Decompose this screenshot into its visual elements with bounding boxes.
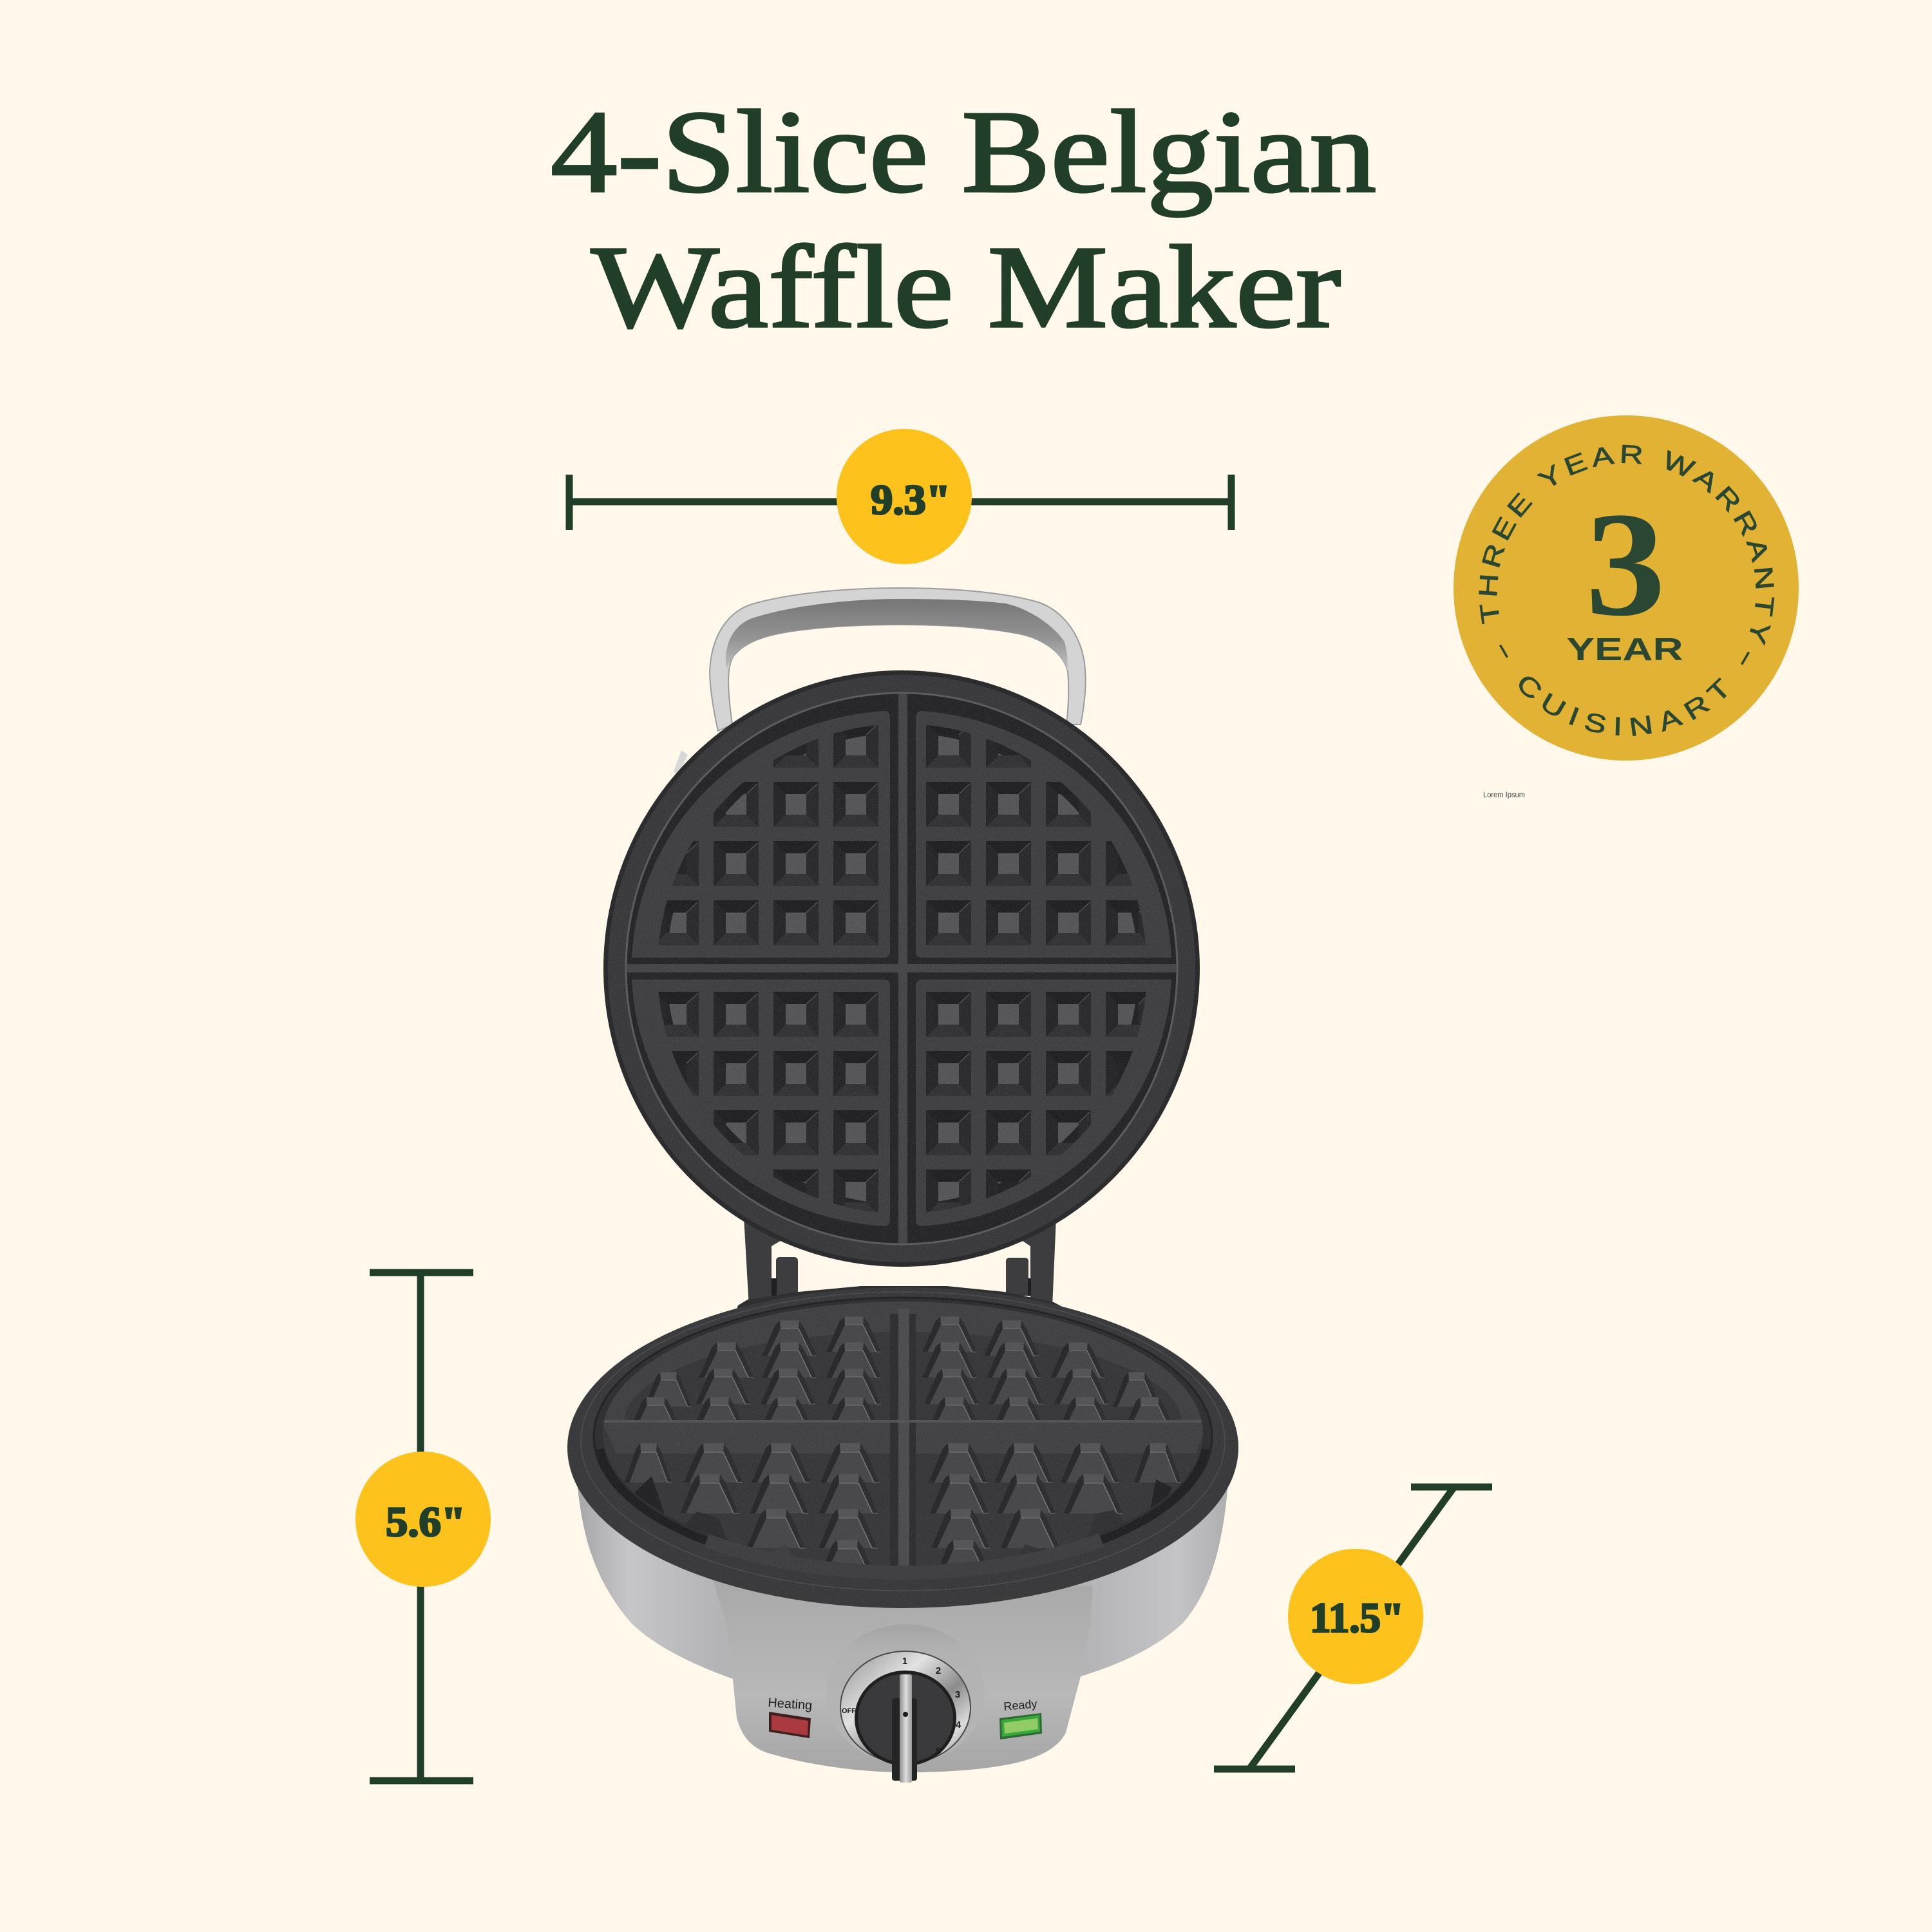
heating light: Heating [768, 1696, 813, 1713]
control panel [768, 1624, 1042, 1783]
front half pyramids [603, 1423, 1203, 1565]
temperature dial [826, 1624, 985, 1783]
silver base [576, 1475, 1229, 1772]
temperature dial: 1 [902, 1656, 907, 1667]
warranty badge [1454, 415, 1799, 761]
dimension: depth 11.5 inches [1214, 1487, 1492, 1769]
temperature dial: 4 [956, 1719, 961, 1730]
handle [674, 588, 1086, 776]
badge brand text: CUISINART [1519, 676, 1727, 736]
title: 4-Slice Belgian [551, 86, 1376, 217]
temperature dial: 5 [936, 1746, 941, 1757]
temperature dial: 3 [955, 1689, 960, 1700]
front lip [706, 1540, 1101, 1573]
back half pyramids [634, 1316, 1170, 1420]
badge year label: YEAR [1566, 632, 1683, 667]
badge numeral: 3 [1586, 482, 1665, 647]
ready light [999, 1698, 1042, 1739]
dimension: width 9.3 inches: 9.3" [871, 477, 951, 524]
plate dividers [890, 1314, 916, 1571]
centre ridges [627, 694, 1177, 1244]
temperature dial: 2 [936, 1665, 941, 1676]
lower waffle plate [567, 1286, 1238, 1608]
lower plate grid [603, 1302, 1203, 1566]
placeholder caption: Lorem Ipsum [1483, 790, 1525, 799]
temperature dial: OFF [842, 1707, 856, 1715]
waffle maker [567, 588, 1238, 1783]
dimension: width 9.3 inches [569, 429, 1231, 564]
title: Waffle Maker [591, 222, 1341, 352]
plate quadrants [632, 711, 1171, 1226]
warranty badge: – [1729, 645, 1759, 670]
dimension: height 5.6 inches: 5.6" [386, 1499, 466, 1546]
ready light: Ready [1003, 1698, 1037, 1713]
warranty badge: – [1490, 638, 1520, 663]
heating light [768, 1696, 813, 1738]
title [551, 86, 1376, 352]
hinge arms [744, 1217, 1056, 1307]
dimension: depth 11.5 inches: 11.5" [1310, 1595, 1404, 1642]
upper waffle plate [603, 670, 1200, 1267]
dimension: height 5.6 inches [355, 1273, 491, 1781]
badge ring text: THREE YEAR WARRANTY [1479, 444, 1775, 646]
waffle pockets [654, 723, 1151, 1215]
